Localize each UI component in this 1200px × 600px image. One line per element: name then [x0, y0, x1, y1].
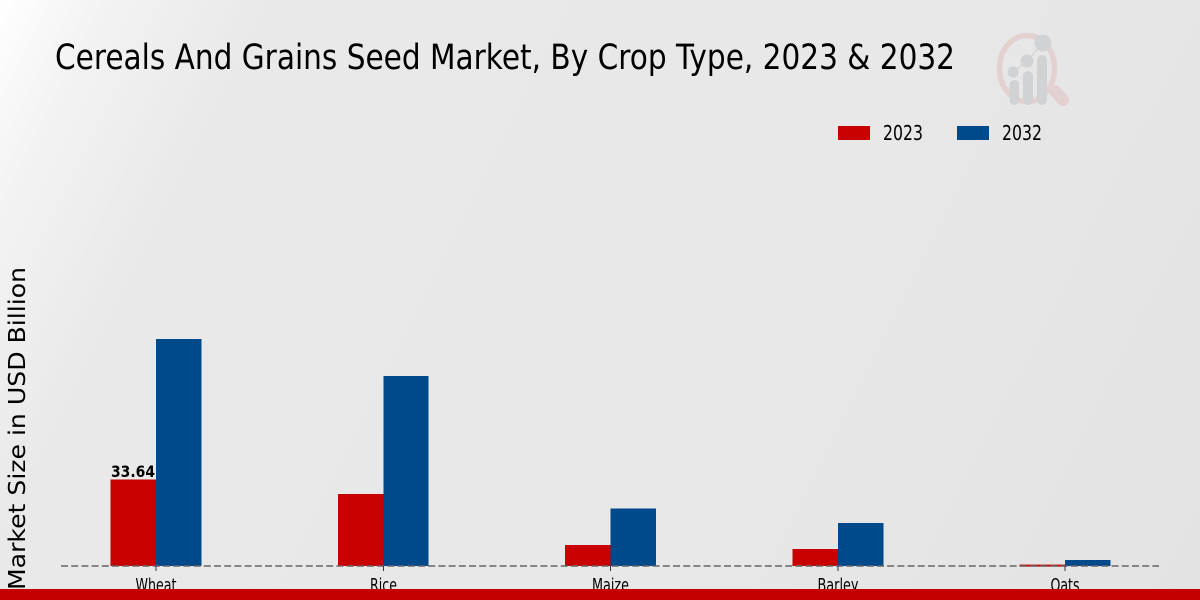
x-axis labels	[136, 575, 1080, 596]
group: Maize	[565, 508, 656, 566]
legend item: 2023: 2023	[883, 121, 923, 145]
legend item: 2032: 2032	[1002, 121, 1042, 145]
x-axis labels: Maize	[592, 575, 629, 596]
footer bar	[0, 589, 1200, 600]
x-axis labels: Wheat	[136, 575, 176, 596]
x-axis labels: Rice	[370, 575, 397, 596]
group: Oats	[1020, 560, 1110, 567]
icon: magnifier logo watermark	[1000, 34, 1063, 105]
group: Wheat	[110, 339, 202, 566]
x-axis labels: Barley	[818, 575, 859, 596]
x-axis labels: Oats	[1050, 575, 1080, 596]
group: Rice	[338, 376, 428, 566]
y-axis label: Market Size in USD Billion	[3, 267, 31, 590]
group: Barley	[792, 523, 884, 566]
title: Cereals And Grains Seed Market, By Crop Type, 2023 & 2032	[55, 38, 955, 78]
legend item: 2032	[957, 121, 1042, 145]
legend item: 2023	[838, 121, 923, 145]
legend	[838, 121, 1042, 145]
bar chart	[110, 339, 1110, 567]
group: Wheat: 33.64	[111, 462, 155, 481]
